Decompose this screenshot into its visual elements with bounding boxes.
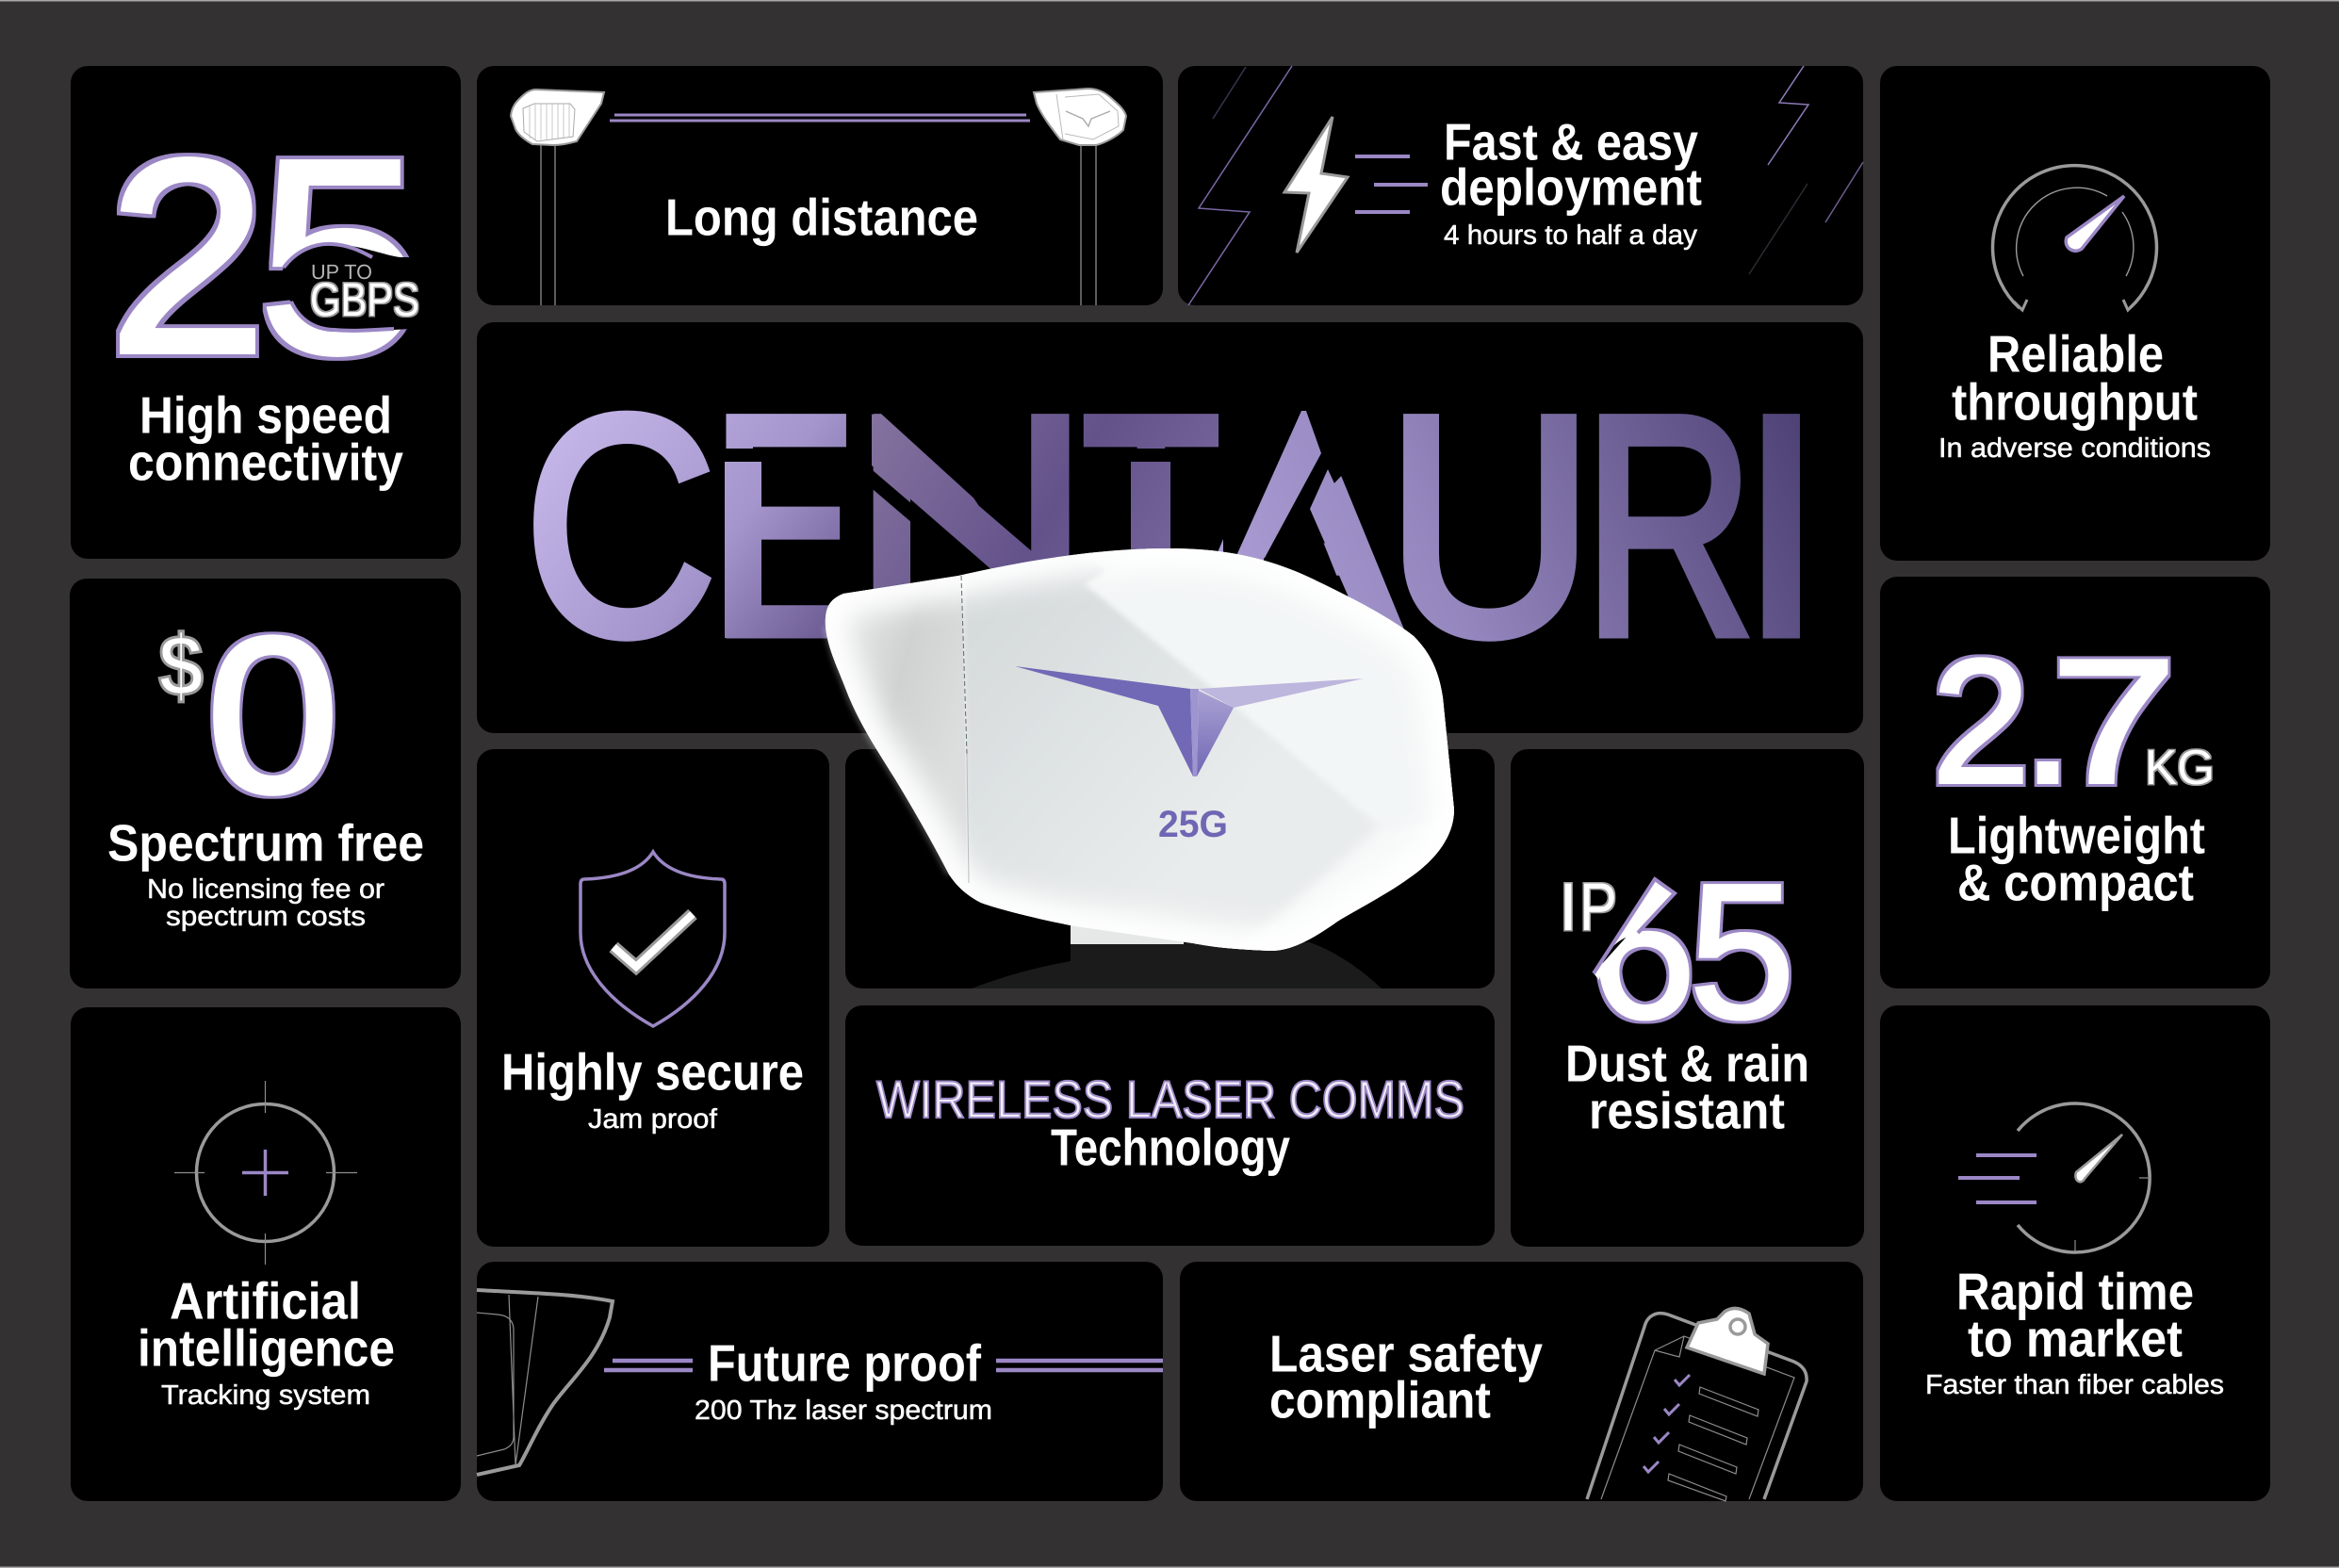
panel: reliable throughput bbox=[1880, 66, 2270, 561]
up to label: UP TO bbox=[311, 260, 372, 284]
title: centauri: N bbox=[851, 351, 1091, 701]
kg label: KG bbox=[2145, 741, 2215, 795]
heading line 2: compliant bbox=[1269, 1371, 1491, 1429]
heading line 2: deployment bbox=[1440, 158, 1702, 217]
number 65 bbox=[1555, 844, 1795, 1059]
panel: highly secure bbox=[477, 749, 829, 1247]
heading: Spectrum free bbox=[107, 814, 424, 873]
panel: spectrum free bbox=[70, 579, 461, 988]
subtext: Tracking system bbox=[161, 1380, 370, 1411]
icon: right device on pole bbox=[1034, 89, 1126, 305]
ip label: P bbox=[1579, 870, 1617, 945]
panel: laser safety compliant bbox=[1180, 1262, 1863, 1501]
device shadow bbox=[972, 942, 1382, 988]
panel: product backdrop bbox=[845, 749, 1495, 988]
heading: Artificial bbox=[170, 1272, 361, 1331]
logo: device mark bbox=[1015, 666, 1364, 776]
cutout behind gbps bbox=[281, 244, 426, 332]
heading: High speed bbox=[139, 386, 392, 445]
panel: lightweight and compact bbox=[1880, 577, 2270, 988]
number 25: 5 bbox=[258, 103, 421, 410]
panel: wireless laser comms bbox=[845, 1005, 1495, 1246]
title: centauri: T bbox=[1082, 351, 1220, 701]
speed lines bbox=[1355, 156, 1428, 212]
icon: stopwatch bbox=[1958, 1103, 2151, 1252]
panel: long distance bbox=[477, 66, 1163, 305]
title: centauri: R bbox=[1583, 351, 1755, 701]
number 65: 6 bbox=[1590, 844, 1696, 1059]
title: centauri: E bbox=[712, 351, 857, 701]
gbps label: GBPS bbox=[310, 273, 419, 326]
heading line 2: intelligence bbox=[138, 1319, 395, 1378]
icon: target reticle bbox=[174, 1081, 357, 1265]
device label 25g: 25G bbox=[1158, 804, 1228, 845]
subtext: No licensing fee or bbox=[147, 874, 384, 905]
title: centauri bbox=[524, 351, 1824, 701]
icon: device outline bbox=[477, 1290, 613, 1475]
heading: Future proof bbox=[708, 1334, 982, 1393]
number 25 bbox=[108, 103, 421, 410]
subtext line 2: spectrum costs bbox=[166, 902, 366, 932]
icon: clipboard bbox=[1587, 1308, 1807, 1501]
ip label: I bbox=[1559, 870, 1578, 945]
heading: wireless laser comms: WIRELESS LASER COMMS bbox=[876, 1070, 1464, 1129]
icon: check mark bbox=[613, 914, 693, 967]
panel: centauri wordmark bbox=[477, 322, 1863, 733]
panel: high speed connectivity bbox=[71, 66, 461, 559]
panel: artificial intelligence bbox=[71, 1007, 461, 1501]
number 2.7 bbox=[1932, 623, 2177, 820]
heading: Fast & easy bbox=[1444, 113, 1698, 172]
panel: ip65 dust and rain bbox=[1511, 749, 1864, 1247]
heading line 2: to market bbox=[1968, 1310, 2183, 1368]
number 2.7: 2 bbox=[1932, 623, 2030, 820]
title: centauri: U bbox=[1385, 351, 1595, 701]
icon: gauge bbox=[1992, 166, 2156, 310]
subtext: In adverse conditions bbox=[1938, 433, 2211, 464]
panel: rapid time to market bbox=[1880, 1005, 2270, 1501]
number 65: 5 bbox=[1689, 844, 1795, 1059]
laser lines left bbox=[604, 1361, 693, 1370]
number 0: 0 bbox=[206, 591, 339, 839]
heading: Long distance bbox=[665, 188, 978, 247]
title: centauri: I bbox=[1740, 351, 1824, 701]
heading line 2: connectivity bbox=[128, 433, 403, 492]
ip label bbox=[1559, 870, 1617, 945]
subtext: 200 Thz laser spectrum bbox=[695, 1396, 992, 1426]
product: centauri laser device bbox=[820, 542, 1470, 961]
panel: fast and easy deployment bbox=[1178, 66, 1863, 305]
heading line 2: throughput bbox=[1952, 373, 2198, 432]
number 25: 2 bbox=[108, 103, 267, 410]
icon: shield bbox=[581, 852, 725, 1026]
laser lines right bbox=[996, 1361, 1163, 1370]
heading: Laser safety bbox=[1269, 1325, 1543, 1383]
icon: left device on pole bbox=[511, 90, 604, 305]
subtext: Faster than fiber cables bbox=[1925, 1370, 2224, 1400]
number 2.7: . bbox=[2022, 623, 2073, 820]
subtext: 4 hours to half a day bbox=[1444, 220, 1697, 251]
laser beam lines bbox=[610, 115, 1030, 121]
dollar sign: $ bbox=[158, 618, 204, 714]
heading line 2: & compact bbox=[1957, 854, 2194, 912]
heading: Lightweight bbox=[1948, 807, 2205, 865]
icon: lightning bolt bbox=[1284, 117, 1348, 253]
subheading: technology: Technology bbox=[1051, 1119, 1290, 1177]
heading: Reliable bbox=[1987, 325, 2164, 384]
subtext: Jam proof bbox=[588, 1104, 718, 1135]
heading: Dust & rain bbox=[1565, 1035, 1809, 1093]
heading: Rapid time bbox=[1956, 1263, 2194, 1321]
number 2.7: 7 bbox=[2051, 623, 2177, 820]
heading line 2: resistant bbox=[1589, 1082, 1785, 1140]
panel: future proof bbox=[477, 1262, 1163, 1501]
heading: Highly secure bbox=[501, 1043, 804, 1102]
title: centauri: A bbox=[1188, 351, 1403, 701]
title: centauri: C bbox=[524, 351, 716, 701]
